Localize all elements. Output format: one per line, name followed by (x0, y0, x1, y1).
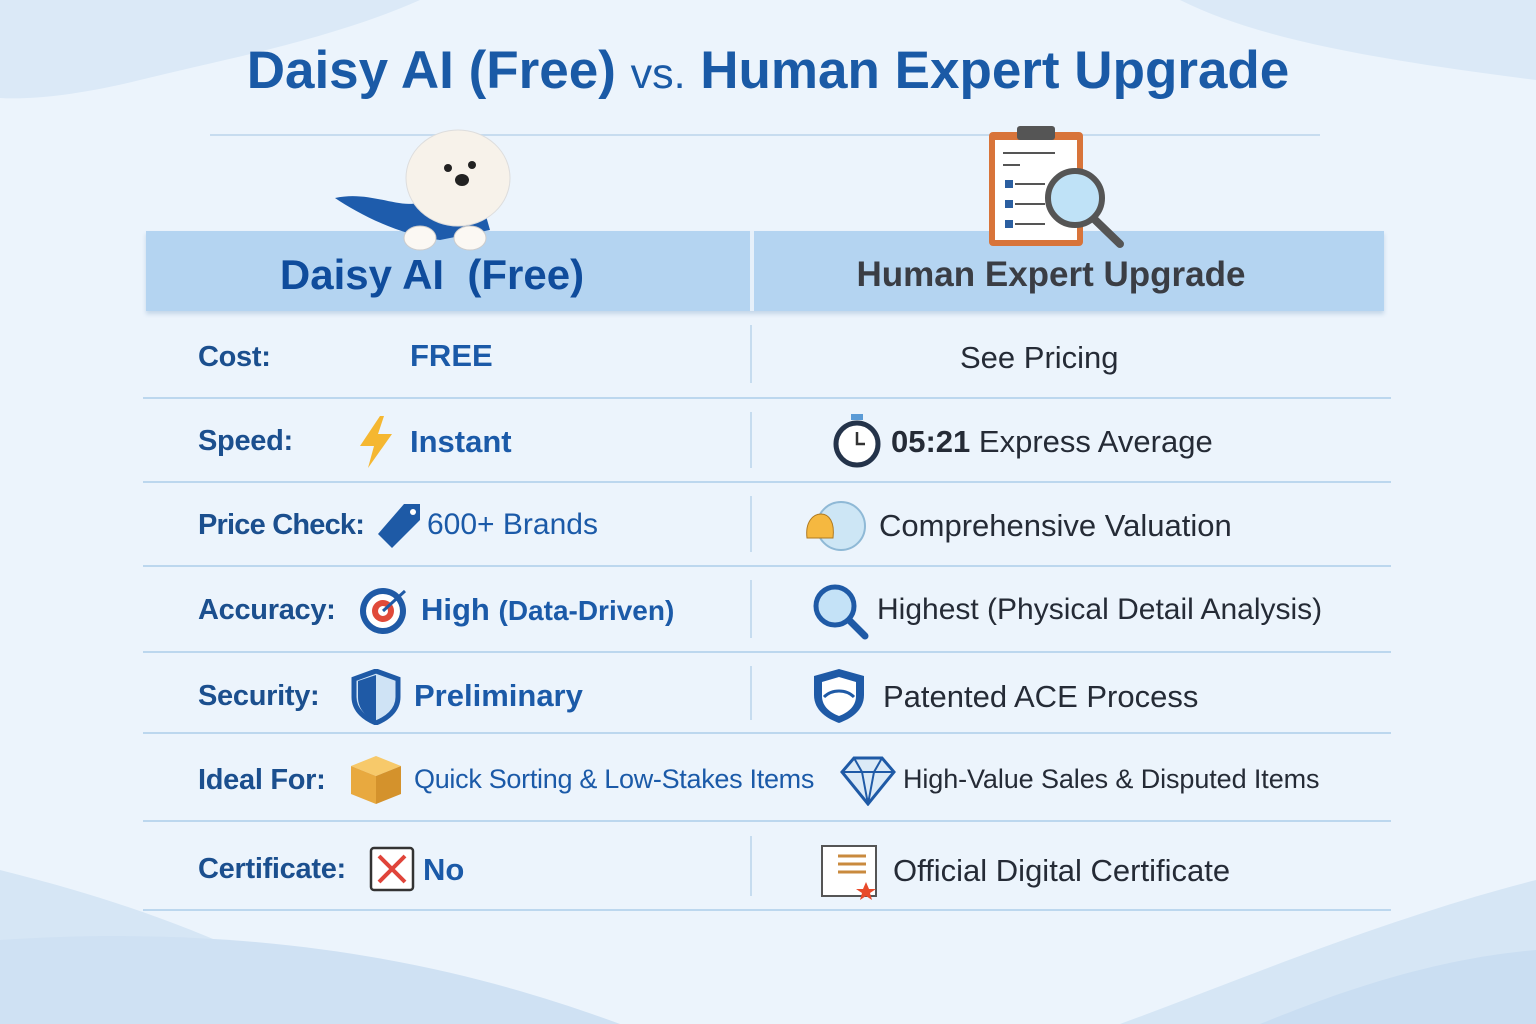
row: accuracy: Highest (Physical Detail Analysis) (877, 593, 1322, 626)
row: ideal for: High-Value Sales & Disputed Items (903, 764, 1319, 794)
row: security: Preliminary (414, 678, 583, 713)
row: accuracy: Accuracy: (198, 594, 336, 626)
icon: magnifier (814, 584, 868, 640)
icon: X box (370, 846, 414, 892)
row: price check: 600+ Brands (427, 508, 598, 541)
icon: tag (378, 504, 420, 548)
row lines (143, 397, 1391, 399)
icon: diamond (840, 756, 896, 806)
row: speed: Instant (410, 424, 512, 459)
icon: lightning (360, 416, 392, 468)
row: security (198, 669, 1198, 725)
row: speed: 05:21 Express Average (891, 424, 1213, 459)
row: certificate (198, 845, 1230, 900)
icon: certificate (821, 845, 877, 900)
icon: box (351, 756, 401, 804)
row: cost: See Pricing (960, 340, 1119, 375)
icon: shield (352, 669, 400, 725)
row: ideal for: Quick Sorting & Low-Stakes Items (414, 764, 814, 794)
title: Daisy AI (Free) vs. Human Expert Upgrade (247, 41, 1289, 100)
row: certificate: Certificate: (198, 853, 346, 885)
header: Human Expert: Human Expert Upgrade (857, 255, 1245, 294)
row: price check: Comprehensive Valuation (879, 508, 1232, 543)
row: certificate: No (423, 852, 464, 887)
row: accuracy (198, 584, 1322, 640)
row: security: Patented ACE Process (883, 679, 1198, 714)
row: speed (198, 414, 1213, 468)
icon: ACE shield (814, 669, 864, 723)
icon: valuation (806, 501, 866, 551)
icon: clipboard with magnifier (989, 126, 1124, 248)
row: price check: Price Check: (198, 509, 364, 541)
header band (146, 231, 1384, 311)
icon: dog mascot (335, 130, 510, 250)
row: cost: FREE (410, 338, 493, 373)
row: security: Security: (198, 680, 319, 712)
row: speed: Speed: (198, 425, 293, 457)
row: cost (198, 338, 1119, 375)
icon: stopwatch (834, 414, 880, 468)
row: certificate: Official Digital Certificate (893, 853, 1230, 888)
row: ideal for: Ideal For: (198, 764, 326, 796)
header: Daisy AI: Daisy AI (Free) (280, 251, 584, 298)
row: accuracy: High (Data-Driven) (421, 592, 674, 627)
row: ideal for (198, 756, 1319, 806)
row: price check (198, 501, 1232, 551)
icon: target (360, 588, 406, 634)
row: cost: Cost: (198, 341, 271, 373)
